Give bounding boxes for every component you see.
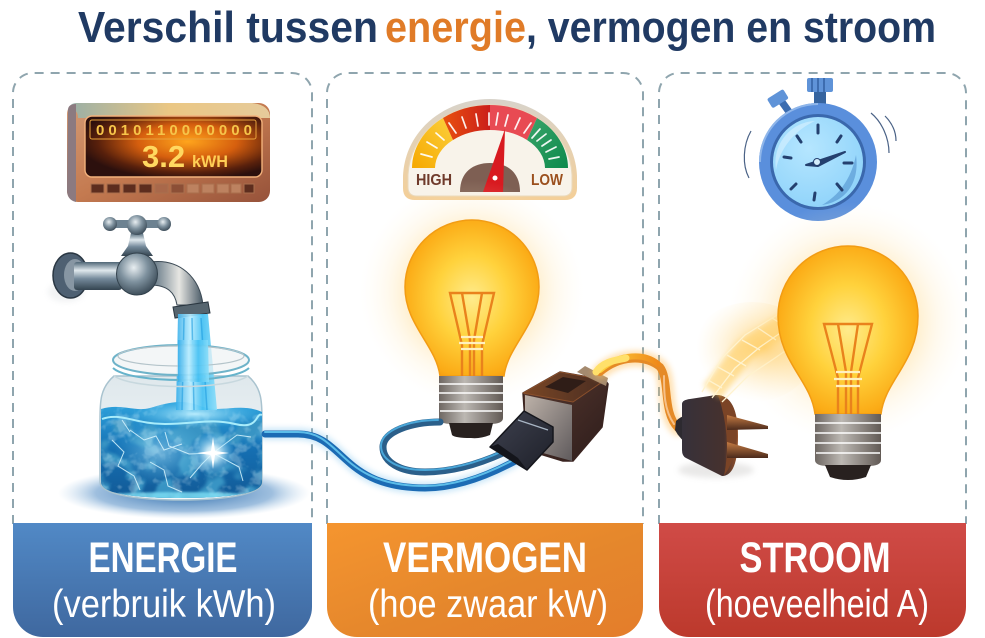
icon: stopwatch [744, 78, 896, 221]
label band: energie: (verbruik kWh) [52, 583, 276, 626]
panel: stroom [659, 73, 966, 637]
label band: vermogen: (hoe zwaar kW) [368, 583, 608, 626]
label band: vermogen [327, 523, 643, 637]
icon: kWh meter: kWH [192, 152, 228, 171]
icon: light bulb vermogen [360, 180, 584, 438]
icon: kWh meter [67, 103, 270, 202]
icon: kWh meter: 0010110000000 [96, 122, 252, 139]
label band: vermogen: VERMOGEN [383, 534, 587, 582]
cable: orange glowing [596, 356, 678, 428]
icon: power gauge: HIGH [416, 172, 452, 189]
panel: energie [13, 73, 312, 637]
label band: stroom: (hoeveelheid A) [705, 583, 929, 626]
title: Verschil tussen [78, 3, 378, 52]
title: energie [385, 3, 526, 52]
icon: water tap [48, 215, 210, 318]
title: , vermogen en stroom [526, 3, 936, 52]
label band: energie [13, 523, 312, 637]
cable: blue loop [265, 420, 517, 488]
icon: plug [675, 395, 768, 478]
panel: vermogen [327, 73, 643, 637]
icon: power gauge: LOW [531, 172, 564, 189]
icon: kWh meter: 3.2 [142, 139, 185, 174]
icon: light bulb stroom [728, 202, 968, 480]
label band: stroom: STROOM [740, 534, 890, 582]
icon: socket and plug [490, 366, 608, 470]
title [78, 3, 936, 52]
icon: glowing current [690, 302, 814, 402]
label band: stroom [659, 523, 966, 637]
label band: energie: ENERGIE [88, 534, 238, 582]
icon: power gauge [403, 99, 577, 200]
icon: jar of water [58, 314, 310, 519]
